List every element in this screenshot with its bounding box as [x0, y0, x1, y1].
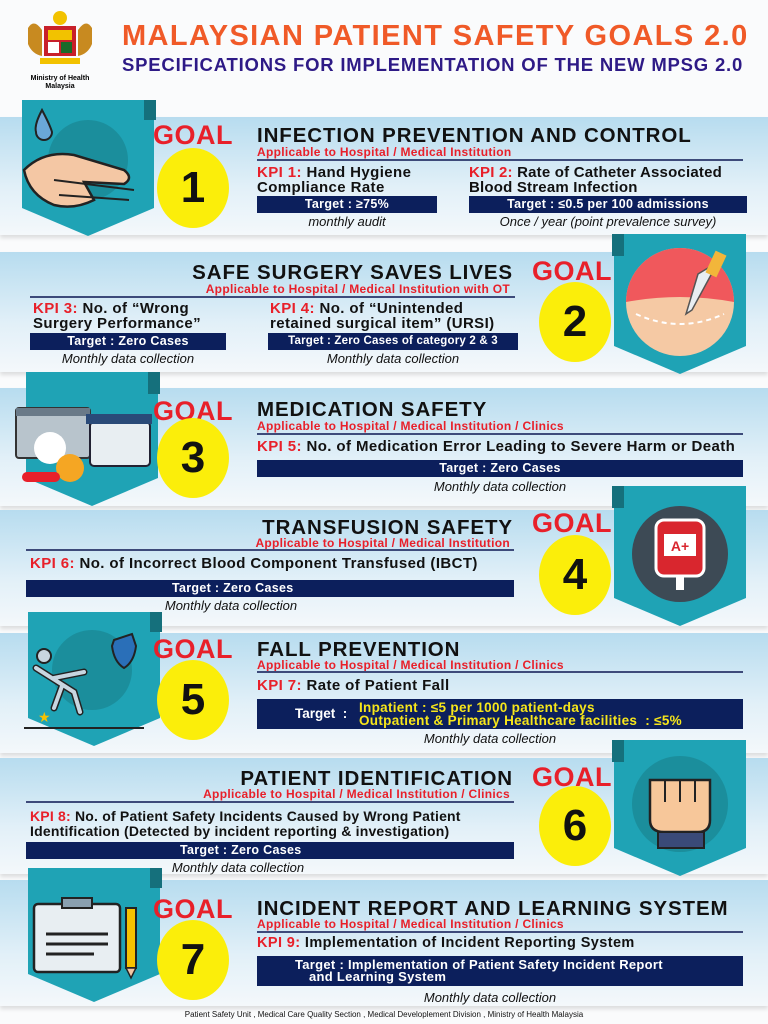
panel: goal 6: 6 — [563, 801, 587, 850]
KPI 4: retained surgical item” (URSI) — [270, 315, 495, 332]
footer: Patient Safety Unit , Medical Care Quality Section , Medical Developlement Division , Ministry of Health Malaysia — [185, 1010, 583, 1019]
panel: goal 2 — [0, 234, 768, 376]
panel: goal 2: Monthly data collection — [62, 351, 194, 366]
panel: goal 5: FALL PREVENTION — [257, 638, 460, 661]
panel: goal 3: GOAL — [153, 396, 233, 426]
KPI 6: KPI 6: No. of Incorrect Blood Component Transfused (IBCT) — [30, 555, 478, 572]
panel: goal 7 — [0, 868, 768, 1010]
icon: medication ribbon — [15, 372, 160, 506]
panel: goal 4: TRANSFUSION SAFETY — [262, 516, 513, 539]
panel: goal 5: Outpatient & Primary Healthcare facilities : ≤5% — [359, 713, 682, 728]
logo: Ministry of Health Malaysia: Ministry of Health — [31, 75, 89, 82]
KPI 8: Identification (Detected by incident reporting & investigation) — [30, 823, 449, 839]
subtitle: SPECIFICATIONS FOR IMPLEMENTATION OF THE NEW MPSG 2.0 — [122, 54, 743, 75]
panel: goal 1: Target : ≤0.5 per 100 admissions — [507, 197, 709, 211]
panel: goal 6: PATIENT IDENTIFICATION — [240, 767, 513, 790]
panel: goal 4: Monthly data collection — [165, 598, 297, 613]
KPI 8 — [30, 808, 461, 839]
panel: goal 2: Target : Zero Cases of category 2 & 3 — [288, 335, 498, 347]
KPI 3: Surgery Performance” — [33, 315, 201, 332]
panel: goal 5 — [0, 612, 768, 757]
panel: goal 1: INFECTION PREVENTION AND CONTROL — [257, 124, 692, 147]
panel: goal 7: and Learning System — [309, 969, 446, 984]
panel: goal 7: INCIDENT REPORT AND LEARNING SYSTEM — [257, 897, 729, 920]
KPI 2 — [469, 164, 722, 196]
logo: Ministry of Health Malaysia — [28, 11, 92, 90]
panel: goal 4: GOAL — [532, 508, 612, 538]
KPI 7: KPI 7: Rate of Patient Fall — [257, 677, 450, 694]
panel: goal 4: 4 — [563, 550, 587, 599]
panel: goal 7: Target : Implementation of Patient Safety Incident Report — [295, 957, 663, 972]
icon: fist with band ribbon — [612, 740, 746, 876]
KPI 1: KPI 1: Hand Hygiene — [257, 164, 411, 181]
panel: goal 4 — [0, 486, 768, 630]
panel: goal 3: Applicable to Hospital / Medical Institution / Clinics — [257, 419, 564, 433]
panel: goal 2: Monthly data collection — [327, 351, 459, 366]
icon: scalpel ribbon — [612, 234, 746, 374]
panel: goal 5: GOAL — [153, 634, 233, 664]
panel: goal 6: Monthly data collection — [172, 860, 304, 875]
heading: GOAL — [153, 120, 233, 150]
panel: goal 1: monthly audit — [308, 214, 386, 229]
icon: hand washing ribbon — [22, 100, 156, 236]
panel: goal 3 — [0, 372, 768, 510]
panel: goal 1: Once / year (point prevalence survey) — [500, 214, 716, 229]
KPI 1 — [257, 164, 411, 196]
panel: goal 4: Target : Zero Cases — [172, 581, 293, 595]
icon: fall ribbon: ★ — [38, 709, 51, 725]
panel: goal 3: Monthly data collection — [434, 479, 566, 494]
panel: goal 5: Inpatient : ≤5 per 1000 patient-days — [359, 700, 595, 715]
KPI 1: Compliance Rate — [257, 179, 385, 196]
KPI 2: KPI 2: Rate of Catheter Associated — [469, 164, 722, 181]
panel: goal 1 — [0, 100, 768, 239]
panel: goal 7: GOAL — [153, 894, 233, 924]
panel: goal 5: 5 — [181, 675, 205, 724]
panel: goal 7: Applicable to Hospital / Medical Institution / Clinics — [257, 917, 564, 931]
icon: blood bag ribbon — [612, 486, 746, 626]
panel: goal 6: Target : Zero Cases — [180, 843, 301, 857]
panel: goal 7: 7 — [181, 935, 205, 984]
panel: goal 5: Applicable to Hospital / Medical Institution / Clinics — [257, 658, 564, 672]
title: MALAYSIAN PATIENT SAFETY GOALS 2.0 — [122, 20, 749, 52]
panel: goal 2: Target : Zero Cases — [67, 334, 189, 348]
text: Malaysia — [45, 83, 75, 90]
panel: goal 1: 1 — [181, 163, 205, 212]
panel: goal 6: Applicable to Hospital / Medical Institution / Clinics — [203, 787, 510, 801]
panel: goal 6: GOAL — [532, 762, 612, 792]
panel: goal 2: Applicable to Hospital / Medical Institution with OT — [206, 282, 510, 296]
panel: goal 2: SAFE SURGERY SAVES LIVES — [192, 261, 513, 284]
panel: goal 1: Applicable to Hospital / Medical Institution — [257, 145, 512, 159]
icon: fall ribbon — [24, 612, 162, 746]
KPI 4 — [270, 300, 495, 332]
panel: goal 5: Target : — [295, 706, 347, 721]
panel: goal 3: 3 — [181, 433, 205, 482]
panel: goal 6 — [0, 740, 768, 878]
KPI 3: KPI 3: No. of “Wrong — [33, 300, 189, 317]
icon: clipboard ribbon — [28, 868, 162, 1002]
panel: goal 5: Monthly data collection — [424, 731, 556, 746]
icon: blood bag ribbon: A+ — [671, 538, 689, 554]
KPI 9: KPI 9: Implementation of Incident Reporting System — [257, 935, 635, 951]
panel: goal 4: Applicable to Hospital / Medical Institution — [255, 536, 510, 550]
KPI 3 — [33, 300, 201, 332]
KPI 2: Blood Stream Infection — [469, 179, 638, 196]
panel: goal 3: MEDICATION SAFETY — [257, 398, 487, 421]
KPI 4: KPI 4: No. of “Unintended — [270, 300, 463, 317]
panel: goal 3: Target : Zero Cases — [439, 461, 561, 475]
KPI 8: KPI 8: No. of Patient Safety Incidents Caused by Wrong Patient — [30, 808, 461, 824]
panel: goal 2: GOAL — [532, 256, 612, 286]
panel: goal 1: Target : ≥75% — [305, 197, 389, 211]
panel: goal 7: Monthly data collection — [424, 990, 556, 1005]
panel: goal 2: 2 — [563, 297, 587, 346]
KPI 5: KPI 5: No. of Medication Error Leading to Severe Harm or Death — [257, 438, 735, 455]
